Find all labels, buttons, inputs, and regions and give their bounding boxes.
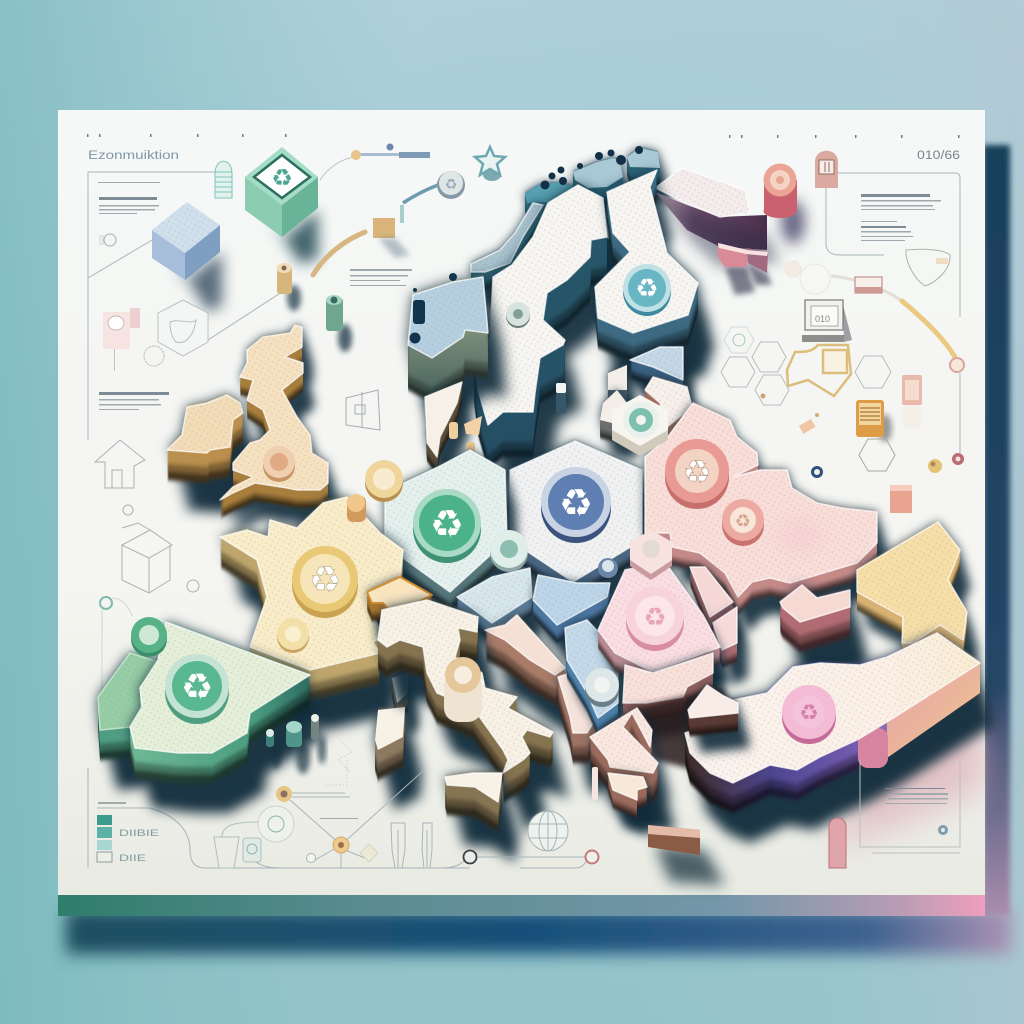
token: Turkey: ♻	[799, 701, 819, 726]
code label: 010/66	[917, 150, 960, 162]
country: Sweden	[474, 185, 607, 425]
token: Portugal	[131, 617, 167, 657]
top tick marks	[87, 134, 960, 138]
token: Spain recycling	[165, 654, 229, 724]
country: Switzerland	[367, 577, 432, 615]
icon: small blue dot	[386, 144, 394, 150]
country: France	[220, 497, 403, 670]
token: Poland large: ♻	[683, 453, 711, 491]
country: Italy	[378, 600, 553, 773]
icon: hexagon with leaf outline	[158, 300, 208, 356]
country: Greece	[590, 708, 658, 773]
center text block	[350, 269, 412, 286]
token: orange pin	[347, 494, 366, 522]
token: Hungary hex	[630, 530, 672, 580]
country: Russia north	[655, 168, 780, 268]
country: Turkey west	[688, 685, 738, 718]
country: Bulgaria	[623, 653, 713, 703]
Black Sea shadow	[632, 688, 738, 770]
icon: teal ring	[100, 597, 112, 609]
country: Denmark	[425, 382, 482, 457]
icon: yellow outline map	[787, 345, 851, 396]
country: Romania hex	[598, 565, 720, 672]
icon: orange document block	[856, 400, 892, 442]
icon: bottom-right pin	[829, 818, 846, 868]
token: Poland large	[665, 439, 729, 509]
country: small eastern piece 2	[713, 607, 737, 650]
icon: silo	[215, 161, 232, 198]
country: Russia fragments	[718, 243, 772, 295]
hexagon cluster	[721, 327, 891, 405]
icon: window outline	[346, 390, 380, 430]
token: Finland recycling: ♻	[635, 274, 659, 304]
token: Benelux recycling: ♻	[430, 502, 464, 546]
icon: globe	[528, 811, 568, 851]
country: Portugal	[98, 653, 158, 730]
token: France recycling	[292, 546, 358, 618]
country: Norway stripe	[471, 203, 543, 272]
token: Poland small	[722, 499, 764, 546]
title text: Ezonmuiktion	[88, 150, 179, 162]
token: Finland recycling	[623, 264, 671, 316]
country: Estonia	[630, 347, 683, 380]
icon: small ring left	[100, 234, 116, 246]
legend: DIIBIE	[119, 828, 159, 838]
right frame lines	[826, 173, 960, 453]
country: Peloponnese	[592, 767, 647, 800]
country: small eastern piece	[690, 567, 733, 617]
country: Baltics small	[608, 365, 627, 390]
token: tan north France	[365, 460, 403, 502]
icon: small orange bits	[760, 394, 819, 434]
icon: laptop: 010	[815, 314, 830, 324]
token: Romania	[626, 587, 684, 651]
tan cylinder	[276, 263, 301, 311]
country: Austria	[457, 568, 532, 623]
token: Balkans white	[585, 668, 619, 707]
left text block	[98, 182, 160, 214]
token: Romania: ♻	[643, 603, 667, 633]
country: Benelux hex	[385, 450, 507, 592]
legend	[97, 802, 159, 863]
country: Sicily	[445, 773, 502, 802]
token: grey marker	[437, 171, 465, 199]
lower left text block	[99, 392, 169, 410]
icon: pink block right	[890, 485, 912, 513]
token: Turkey	[782, 685, 836, 744]
pillars by Spain	[266, 714, 326, 774]
faded rings	[785, 261, 830, 294]
dotted hint lines	[325, 740, 352, 785]
country: Balkans west	[485, 615, 565, 675]
country: Lithuania	[600, 390, 640, 425]
token: south France	[277, 618, 309, 653]
token: small blue	[598, 558, 618, 578]
green cylinder	[326, 295, 352, 352]
token: UK	[263, 446, 295, 482]
country: Moldova	[780, 585, 850, 622]
small dots right	[811, 453, 964, 478]
icon: laptop	[802, 300, 852, 342]
country: Sardinia	[375, 707, 405, 750]
token: Spain recycling: ♻	[181, 667, 213, 708]
token: Germany recycling: ♻	[559, 481, 593, 525]
icon: dashed ring	[144, 346, 164, 366]
country: Arctic cap	[525, 146, 660, 203]
icons: small rings left	[123, 505, 199, 592]
icon: star	[475, 147, 505, 181]
token: Sweden	[506, 302, 530, 328]
token: Benelux recycling	[413, 489, 481, 563]
icon: pink phone	[902, 375, 922, 429]
token: France recycling: ♻	[309, 560, 341, 601]
hexagon under block	[859, 439, 895, 471]
icon: house outline	[95, 440, 145, 488]
board drop shadow	[66, 145, 1011, 954]
country: Poland and east	[645, 403, 877, 597]
connector with blue bar	[320, 150, 430, 180]
board panel	[58, 110, 985, 916]
curved connector with yellow arc	[831, 276, 964, 372]
country: Corsica	[392, 672, 408, 703]
country: Great Britain	[220, 325, 328, 500]
icon: open box outline	[122, 523, 172, 593]
tan curved connector	[313, 185, 438, 275]
country: Serbia	[565, 620, 618, 718]
country: Latvia	[645, 377, 692, 427]
token: Italy cylinder	[444, 657, 482, 722]
bottom network diagram	[214, 770, 598, 868]
token: Germany recycling	[541, 467, 611, 543]
country: Czechia	[533, 575, 610, 625]
icon: green recycling cube	[245, 147, 318, 264]
legend: DIIE	[119, 853, 146, 863]
icon: blue cube	[152, 202, 222, 312]
pillar: Gotland	[556, 383, 566, 413]
top-right badge	[815, 151, 838, 188]
country: Cyprus	[648, 825, 725, 885]
icon: blob outline	[906, 249, 950, 286]
sea block between Sweden and Finland	[547, 238, 630, 320]
country: blue textured region	[408, 273, 488, 358]
country: Ireland	[167, 395, 243, 453]
token: Baltic teal hex	[612, 395, 668, 456]
country: Albania	[558, 673, 595, 733]
icon: green recycling cube: ♻	[271, 164, 293, 192]
Turkey pink glow	[830, 705, 985, 850]
token: Alps teal	[490, 530, 528, 572]
bottom-right frame and text block	[860, 760, 960, 853]
country: Spain	[130, 622, 310, 753]
icon: pink blocks	[103, 308, 140, 371]
country: Germany hex	[510, 441, 642, 582]
top-right pin token	[764, 164, 805, 244]
left frame lines	[88, 172, 470, 868]
country: Finland	[595, 170, 698, 333]
country: Ukraine east	[857, 522, 967, 643]
token: Poland small: ♻	[735, 511, 751, 532]
token: grey marker: ♻	[445, 177, 457, 193]
country: Turkey	[685, 633, 980, 783]
right text block	[861, 194, 941, 241]
